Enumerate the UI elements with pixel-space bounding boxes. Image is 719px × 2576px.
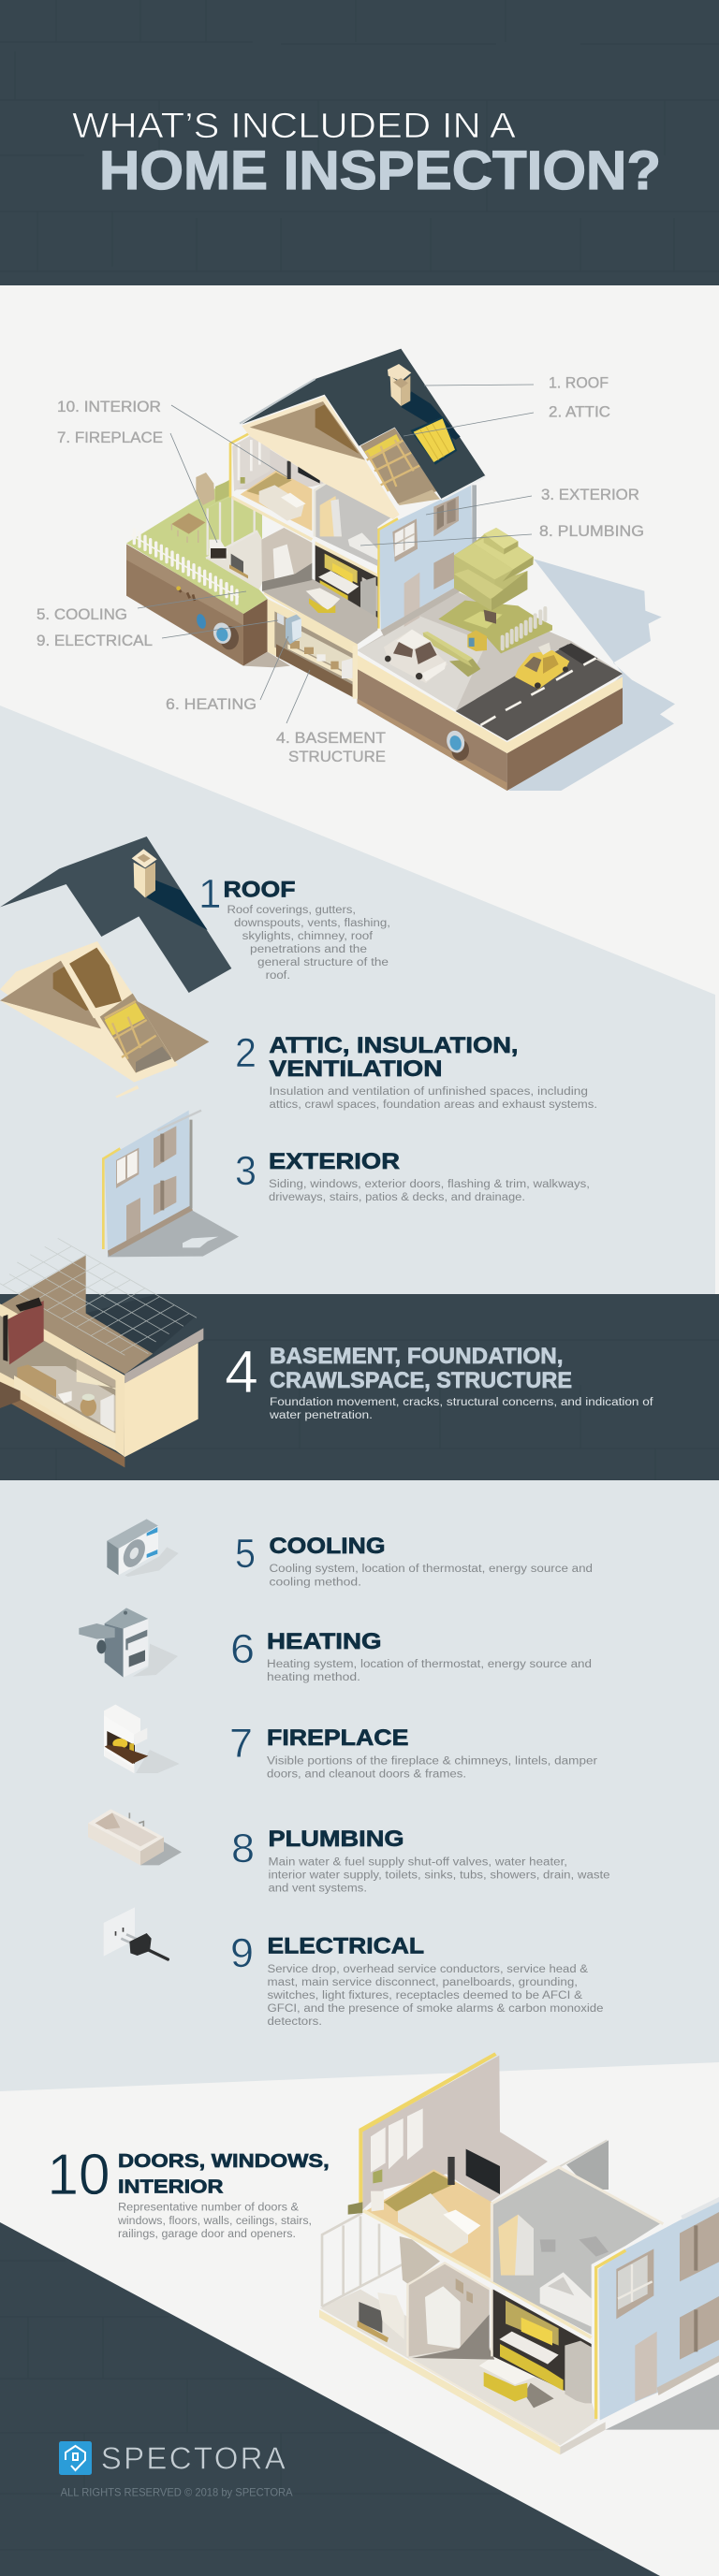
heading: HEATING [267, 1629, 382, 1654]
number: 6 [230, 1626, 255, 1672]
description [267, 1755, 597, 1780]
icon: fireplace [104, 1705, 180, 1773]
copyright: ALL RIGHTS RESERVED © 2018 by SPECTORA [61, 2486, 293, 2499]
heading: ATTIC, INSULATION, [270, 1033, 519, 1058]
label: roof: 1. ROOF [549, 375, 609, 392]
gable and attic [242, 396, 400, 519]
label: heating: 6. HEATING [166, 696, 257, 713]
icon: attic [0, 941, 209, 1098]
description [269, 1397, 653, 1421]
description [268, 1856, 610, 1895]
section 5: cooling [235, 1531, 593, 1589]
label: basement structure: 4. BASEMENT [276, 730, 386, 747]
label: plumbing: 8. PLUMBING [539, 523, 644, 540]
panel: dark band [0, 1294, 719, 1480]
icon: spectora house [59, 2441, 92, 2475]
description: windows, floors, walls, ceilings, stairs, [117, 2216, 312, 2227]
number: 10 [47, 2143, 110, 2207]
description: skylights, chimney, roof [242, 931, 374, 942]
description: Siding, windows, exterior doors, flashing & trim, walkways, [269, 1179, 590, 1190]
description: Service drop, overhead service conductors, service head & [268, 1964, 588, 1975]
description: Cooling system, location of thermostat, energy source and [270, 1564, 593, 1575]
section 10: interior [47, 2143, 330, 2240]
number: 3 [235, 1148, 257, 1194]
leader lines [138, 385, 534, 723]
section 4: basement [225, 1338, 653, 1421]
description [267, 1659, 592, 1683]
description: doors, and cleanout doors & frames. [267, 1768, 466, 1780]
panel: white diagonal background [0, 2062, 719, 2576]
section 9: electrical [230, 1930, 603, 2028]
heading: COOLING [270, 1534, 386, 1559]
icon: plug [104, 1907, 168, 1959]
description: downspouts, vents, flashing, [234, 918, 390, 929]
footer logo [59, 2441, 286, 2476]
left garden block [126, 473, 290, 667]
description: detectors. [268, 2016, 322, 2028]
main house [206, 349, 485, 699]
kitchen [493, 2290, 592, 2403]
description: cooling method. [270, 1578, 361, 1589]
description [227, 905, 390, 982]
yard items: tree, fence, cars [384, 528, 569, 690]
heading: INTERIOR [118, 2176, 224, 2197]
description: and vent systems. [268, 1884, 367, 1895]
heading: PLUMBING [268, 1826, 404, 1852]
icon: basement [0, 1238, 203, 1467]
number: 4 [225, 1338, 258, 1405]
section 6: heating [230, 1626, 592, 1683]
label: basement structure [276, 730, 386, 765]
description: mast, main service disconnect, panelboards, grounding, [268, 1977, 578, 1988]
number: 9 [230, 1930, 254, 1976]
number: 5 [235, 1531, 256, 1577]
illustration: house cutaway [126, 349, 675, 791]
heading [118, 2151, 330, 2197]
section 3: exterior [235, 1148, 590, 1203]
upper floors [237, 437, 325, 489]
panel: blue-grey diagonal background [0, 706, 715, 1294]
description: Representative number of doors & [118, 2203, 299, 2214]
description: heating method. [267, 1672, 360, 1683]
heading [270, 1344, 572, 1393]
description [270, 1086, 597, 1111]
number: 7 [229, 1721, 253, 1767]
number: 2 [235, 1030, 257, 1076]
icon: air conditioner [107, 1519, 179, 1577]
section 1: roof [198, 871, 390, 982]
wordmark: SPECTORA [101, 2441, 286, 2476]
section 8: plumbing [231, 1826, 610, 1895]
icon: furnace [79, 1608, 178, 1678]
description [269, 1179, 590, 1203]
bathroom [315, 482, 393, 566]
right yard block [358, 559, 675, 791]
heading: EXTERIOR [269, 1149, 400, 1174]
heading: BASEMENT, FOUNDATION, [270, 1344, 564, 1369]
description: attics, crawl spaces, foundation areas and exhaust systems. [270, 1099, 597, 1111]
description: Visible portions of the fireplace & chimneys, lintels, damper [267, 1755, 597, 1767]
label: cooling: 5. COOLING [37, 606, 127, 623]
description: Main water & fuel supply shut-off valves, water heater, [268, 1856, 567, 1868]
icon: bathtub [88, 1809, 182, 1865]
description: roof. [266, 970, 290, 982]
description: Roof coverings, gutters, [227, 905, 356, 916]
label: electrical: 9. ELECTRICAL [37, 633, 153, 649]
heading: CRAWLSPACE, STRUCTURE [270, 1368, 572, 1393]
description [270, 1564, 593, 1589]
label: exterior: 3. EXTERIOR [541, 487, 639, 503]
label: interior: 10. INTERIOR [57, 399, 161, 415]
description [268, 1964, 603, 2028]
lower floor [262, 578, 377, 644]
number: 1 [198, 871, 221, 917]
description: penetrations and the [250, 944, 367, 955]
description: general structure of the [257, 957, 389, 968]
title line 2: HOME INSPECTION? [99, 140, 661, 201]
heading [270, 1033, 519, 1082]
heading: VENTILATION [270, 1056, 442, 1082]
blue front wall [598, 2199, 719, 2421]
description: switches, light fixtures, receptacles deemed to be AFCI & [268, 1990, 582, 2001]
description: GFCI, and the presence of smoke alarms & carbon monoxide [268, 2003, 603, 2015]
chimney [390, 376, 401, 406]
description: Foundation movement, cracks, structural concerns, and indication of [270, 1397, 653, 1408]
section 7: fireplace [229, 1721, 597, 1780]
bathroom [493, 2168, 660, 2335]
description: Heating system, location of thermostat, energy source and [267, 1659, 592, 1670]
panel: lower background [0, 1480, 719, 2098]
kitchen [315, 545, 377, 629]
description [117, 2203, 312, 2240]
heading: DOORS, WINDOWS, [118, 2151, 330, 2172]
description: Insulation and ventilation of unfinished spaces, including [270, 1086, 588, 1098]
title line 1: WHAT’S INCLUDED IN A [72, 107, 517, 146]
icon: exterior wall [103, 1111, 239, 1257]
heading: ROOF [223, 877, 296, 902]
lower-left room [206, 496, 262, 559]
section 2: attic [235, 1030, 597, 1111]
description: railings, garage door and openers. [118, 2229, 296, 2240]
back wall [362, 2056, 548, 2210]
hero callout labels [37, 375, 644, 765]
heading: ELECTRICAL [268, 1934, 424, 1959]
label: attic: 2. ATTIC [549, 404, 610, 421]
number: 8 [231, 1826, 255, 1871]
heading: FIREPLACE [267, 1725, 408, 1751]
lower room [409, 2263, 490, 2356]
description: interior water supply, toilets, sinks, tubs, showers, drain, waste [268, 1870, 610, 1882]
label: basement structure: STRUCTURE [288, 749, 386, 765]
roof [242, 349, 485, 499]
icon: roof [0, 837, 231, 993]
label: fireplace: 7. FIREPLACE [57, 429, 163, 446]
blue front wall [379, 485, 473, 630]
description: driveways, stairs, patios & decks, and drainage. [269, 1192, 525, 1203]
ground floor slab [320, 2290, 597, 2445]
description: water penetration. [269, 1410, 373, 1421]
illustration: interior cutaway [319, 2052, 719, 2454]
patio frames [322, 2213, 403, 2307]
basement [268, 599, 358, 699]
panel: dark footer triangle [0, 2222, 660, 2576]
panel: header [0, 0, 719, 285]
